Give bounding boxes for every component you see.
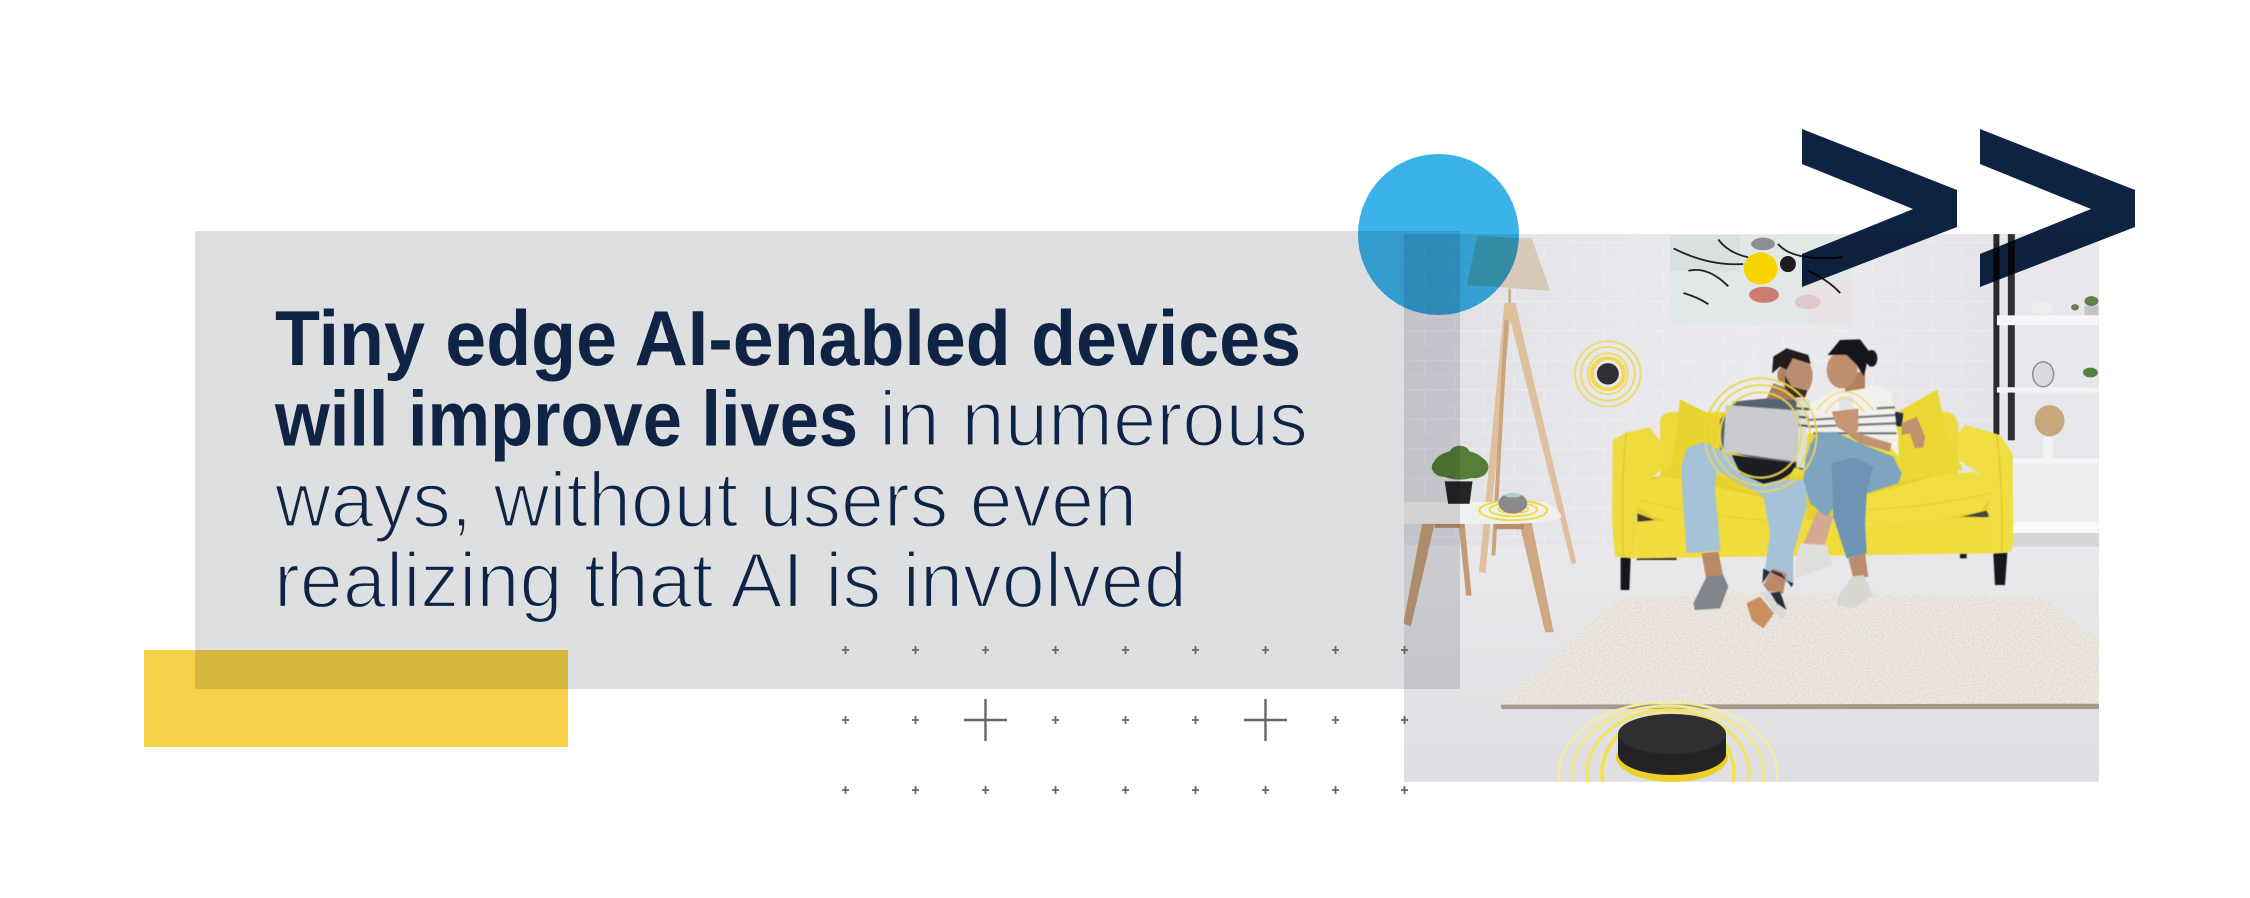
man and woman on the sofa [1681,339,1925,628]
yellow accent bar [144,650,568,747]
woman's head [1827,339,1877,392]
painting [1670,235,1852,325]
woman's jeans [1803,432,1902,558]
wall [1404,234,1994,546]
blue circle accent [1358,154,1519,315]
woman's hands, forearm and phone [1817,392,1892,452]
man's head [1767,348,1813,400]
lower legs and shoes [1693,552,1873,628]
icon: laptop [1723,405,1799,462]
heading text [274,296,1308,624]
photo: living room with smart devices [1404,234,2099,782]
heading text: ways, without users even [274,457,1137,543]
icon: laptop signal rings [1705,378,1817,492]
man's jeans [1681,442,1807,583]
heading text: in numerous [879,377,1308,463]
shelving unit [1993,234,2099,547]
icon: robot vacuum with signal rings [1558,700,1778,782]
heading text: realizing that AI is involved [274,538,1187,624]
dark shadow under laptop [1732,455,1797,484]
sofa pillows [1659,389,1963,482]
panel: grey text background [195,231,1460,689]
heading text: Tiny edge AI-enabled devices [275,296,1301,382]
man's torso [1720,398,1811,470]
arm and hand behind woman [1895,412,1925,448]
icon: thermostat with signal rings [1575,341,1641,406]
heading text: will improve lives [274,377,858,463]
double chevron arrows [1802,129,2135,287]
woman's calf and white shoe [1795,508,1833,578]
plus sign dot grid [842,646,1408,794]
side table with plant and smart speaker [1403,446,1562,632]
rug [1499,593,2099,709]
floor lamp [1467,236,1577,573]
sofa [1612,389,2013,590]
floor [1404,545,2099,782]
woman's torso [1807,385,1898,457]
icon: smart speaker signal rings [1480,501,1547,520]
